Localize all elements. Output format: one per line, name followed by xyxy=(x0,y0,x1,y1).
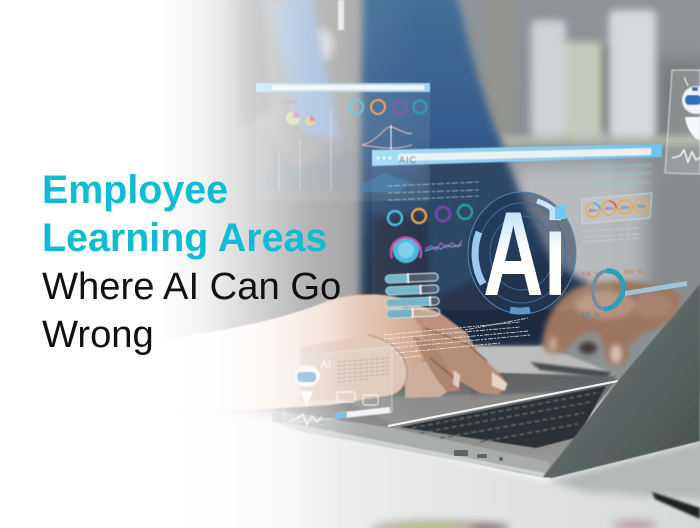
text lines xyxy=(388,182,642,242)
hologram sliders panel xyxy=(385,272,440,319)
front dashboard window xyxy=(372,144,662,310)
photo: businessman in blue suit xyxy=(230,0,590,348)
panel caption: AAA_0010081 xyxy=(268,99,298,104)
area chart xyxy=(266,118,350,190)
finger gap shadows xyxy=(425,328,487,390)
ring percentages: 70% xyxy=(636,204,646,209)
ring percentages: 50% xyxy=(620,205,630,210)
laptop base xyxy=(272,372,617,478)
desk strip behind laptop xyxy=(465,346,615,374)
back dashboard window xyxy=(256,83,430,201)
gauge row xyxy=(388,205,472,225)
right hand xyxy=(543,281,682,366)
emblem square dot xyxy=(555,205,566,219)
laptop xyxy=(272,284,700,478)
address text: AIC xyxy=(399,155,417,165)
index finger xyxy=(420,325,508,395)
nails xyxy=(492,372,507,391)
left hand xyxy=(120,294,508,418)
ring percentages: 30% xyxy=(588,208,598,213)
heading line 2: Learning Areas xyxy=(42,216,327,260)
teal arc xyxy=(604,271,623,309)
pen on table xyxy=(652,492,700,519)
line graph xyxy=(425,240,462,250)
table surface xyxy=(0,415,700,528)
ports xyxy=(454,450,503,461)
shelf bottles xyxy=(500,10,700,145)
title bar xyxy=(256,83,430,92)
middle finger xyxy=(412,335,462,392)
subtitle line 2: Wrong xyxy=(42,313,154,356)
cyan donut chart: 060_% xyxy=(624,270,643,276)
title bar with address field xyxy=(372,144,662,166)
ring percentages: 40% xyxy=(604,206,614,211)
under finger xyxy=(405,360,447,398)
laptop lid xyxy=(543,284,700,478)
palm and arm xyxy=(120,294,480,418)
robot chat hologram panel xyxy=(283,347,392,425)
lid hinge highlight xyxy=(388,381,618,426)
emblem rings xyxy=(468,192,576,314)
shirt collar xyxy=(338,0,344,30)
wire chart xyxy=(360,173,410,192)
gauge row xyxy=(349,100,426,114)
photo background: office shelves xyxy=(0,0,700,420)
lower-left white fade xyxy=(0,296,360,528)
emblem lettering: Ai xyxy=(483,187,567,321)
robot hologram card xyxy=(665,70,700,174)
heading line 1: Employee xyxy=(42,168,228,212)
small right status bar xyxy=(625,281,687,296)
donut labels: 008_% xyxy=(581,272,600,278)
subtitle line 1: Where AI Can Go xyxy=(42,265,341,308)
pie icons xyxy=(286,111,300,125)
score ring panel xyxy=(582,193,652,224)
title xyxy=(42,168,341,356)
back finger xyxy=(400,305,481,358)
hologram text paragraphs xyxy=(384,318,530,358)
trackpad xyxy=(340,392,560,425)
AI hologram emblem xyxy=(468,187,576,321)
grey-blue arc xyxy=(593,271,606,309)
knuckle xyxy=(300,335,407,402)
equalizer bars xyxy=(590,165,652,184)
curve chart xyxy=(362,127,412,148)
robot chat hologram panel: Ai xyxy=(320,359,331,371)
ring percentages xyxy=(588,204,646,213)
large pink ring gauge xyxy=(391,237,421,263)
cyan donut chart xyxy=(581,270,643,319)
second trackpad surface xyxy=(530,362,612,378)
keyboard xyxy=(400,386,606,448)
cyan donut chart: 030_% xyxy=(581,313,600,319)
